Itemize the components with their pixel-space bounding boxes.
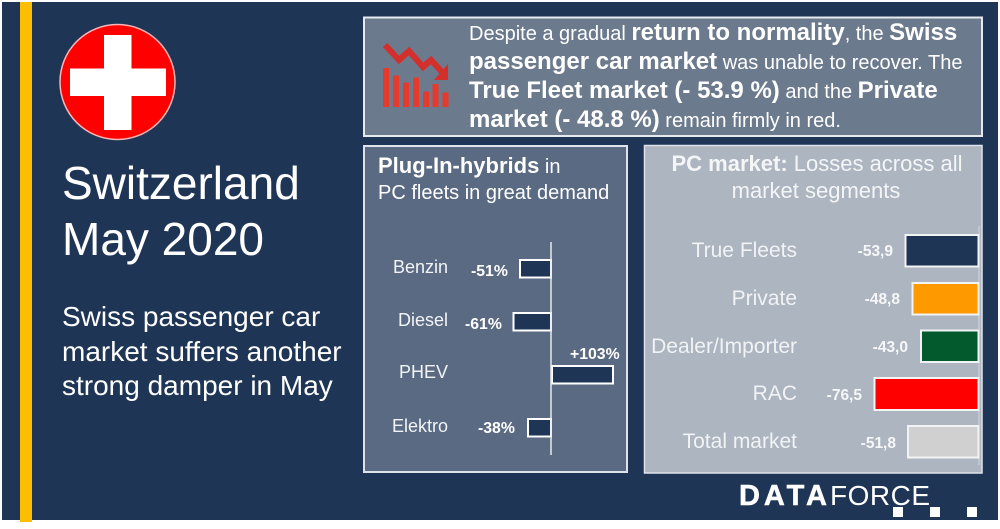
accent bar — [20, 2, 32, 522]
bar chart: segments: True Fleets — [692, 239, 797, 262]
bar chart: fuel types: -61% — [465, 316, 502, 333]
subtitle — [62, 301, 342, 401]
summary text: passenger car market was unable to recover. The — [469, 48, 962, 75]
subtitle: market suffers another — [62, 336, 342, 367]
summary text: True Fleet market (- 53.9 %) and the Private — [469, 77, 938, 104]
heading: market segments — [732, 178, 900, 203]
summary text: Despite a gradual return to normality, the Swiss — [469, 19, 957, 46]
panel: plug-in hybrids — [364, 146, 627, 472]
bar chart: fuel types: Elektro — [392, 416, 448, 436]
heading: PC market: Losses across all — [671, 151, 963, 176]
bar chart: fuel types: +103% — [570, 346, 620, 363]
heading: PC fleets in great demand — [378, 182, 609, 204]
bar chart: segments: RAC — [753, 382, 797, 405]
bar chart: fuel types: Diesel — [398, 310, 448, 330]
heading — [671, 151, 963, 203]
title: Switzerland — [62, 157, 300, 209]
bar chart: segments — [651, 226, 979, 465]
bar chart: segments: Total market — [683, 430, 797, 453]
panel: summary — [364, 18, 982, 136]
bar chart: segments: -51,8 — [861, 435, 896, 452]
icon: falling chart — [383, 45, 448, 107]
logo: Dataforce — [739, 480, 977, 517]
bar chart: segments: -76,5 — [827, 387, 862, 404]
heading: Plug-In-hybrids in — [378, 153, 560, 178]
bar chart: segments: Private — [732, 287, 797, 310]
subtitle: strong damper in May — [62, 370, 333, 401]
bar chart: fuel types: -38% — [478, 420, 515, 437]
summary text — [469, 19, 962, 133]
subtitle: Swiss passenger car — [62, 301, 320, 332]
bar chart: segments: -48,8 — [865, 291, 900, 308]
bar chart: fuel types: -51% — [471, 263, 508, 280]
heading — [378, 153, 609, 204]
bar chart: fuel types — [392, 242, 620, 455]
bar chart: segments: -53,9 — [858, 243, 893, 260]
bar chart: fuel types: PHEV — [399, 362, 448, 382]
logo: Dataforce: DATA — [739, 480, 827, 512]
icon: Swiss flag — [60, 24, 175, 140]
bar chart: segments: Dealer/Importer — [651, 335, 797, 358]
bar chart: fuel types: Benzin — [393, 257, 448, 277]
panel: PC market — [644, 146, 982, 473]
title — [62, 157, 300, 265]
title: May 2020 — [62, 213, 264, 265]
logo: Dataforce: FORCE — [830, 480, 930, 511]
bar chart: segments: -43,0 — [873, 339, 908, 356]
summary text: market (- 48.8 %) remain firmly in red. — [469, 106, 841, 133]
